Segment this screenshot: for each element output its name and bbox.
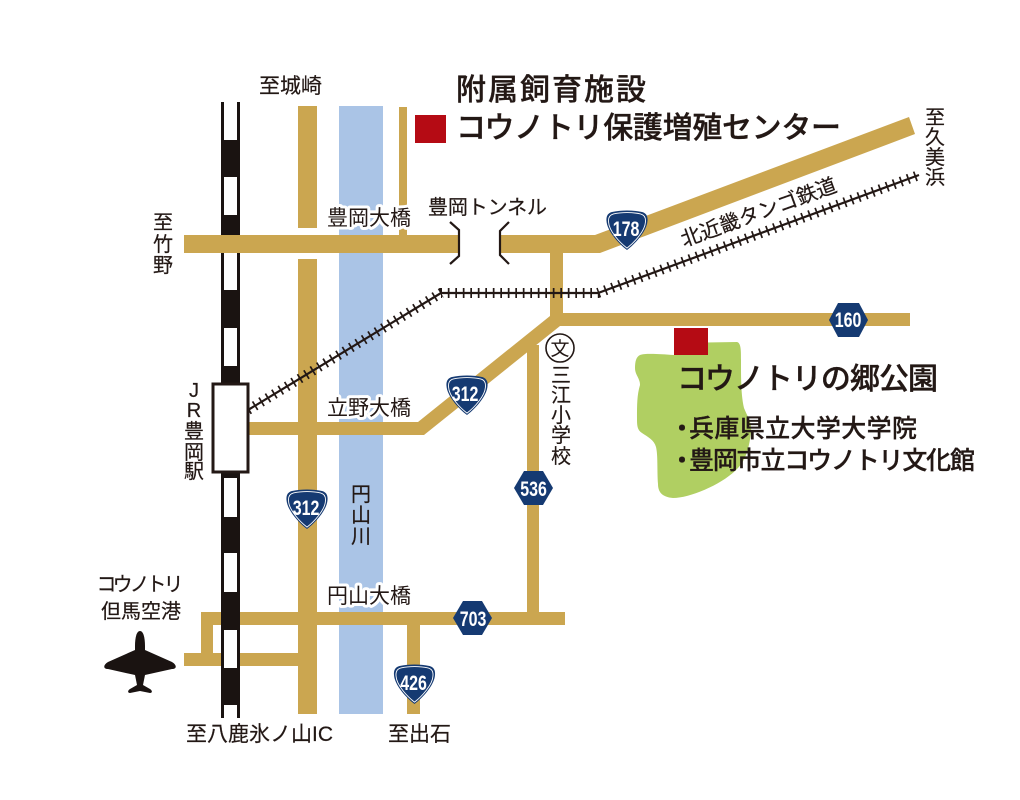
label: JR Toyooka station: R xyxy=(187,400,201,422)
label: to Kumihama xyxy=(925,107,945,189)
bridge label: Toyooka: 豊岡大橋 xyxy=(327,207,411,230)
bridge label: Tateno: 立野大橋 xyxy=(327,397,411,420)
label: Mie elementary school: 江 xyxy=(551,384,571,407)
label: JR Toyooka station: 岡 xyxy=(184,442,204,464)
label: to Kinosaki: 至城崎 xyxy=(259,75,322,98)
icon: school symbol: 文 xyxy=(550,338,570,360)
label: to Izushi: 至出石 xyxy=(388,723,451,746)
label: to Takeno xyxy=(153,212,173,277)
label: to Kumihama: 浜 xyxy=(925,166,945,189)
icon: school symbol xyxy=(546,334,574,362)
label: Mie elementary school xyxy=(551,365,571,468)
railway: Kitakinki Tango line xyxy=(248,175,919,410)
label: Maruyama river: 山 xyxy=(351,504,371,527)
label: JR Toyooka station: 駅 xyxy=(184,461,204,483)
route shield: 426: 426 xyxy=(400,671,427,695)
park facilities: ・ xyxy=(669,447,695,475)
label: to Yoka Hyonosen IC: 至八鹿氷ノ山IC xyxy=(186,723,333,746)
icon: airplane xyxy=(104,631,176,693)
label: to Takeno: 竹 xyxy=(153,233,173,256)
route sign: 703: 703 xyxy=(460,607,486,631)
route shield: 426 xyxy=(394,664,435,704)
label: Tajima airport: コウノトリ xyxy=(96,574,184,596)
river: Maruyama xyxy=(339,106,383,714)
title: breeding center: コウノトリ保護増殖センター xyxy=(456,112,841,145)
route shield: 312 lower xyxy=(286,490,328,529)
park facilities xyxy=(669,415,975,475)
label: JR Toyooka station: J xyxy=(189,380,199,402)
park facilities: ・ xyxy=(669,415,695,443)
label: Mie elementary school: 校 xyxy=(551,445,571,468)
label: JR Toyooka station: 豊 xyxy=(184,420,204,443)
label: Mie elementary school: 三 xyxy=(551,365,571,387)
label: to Takeno: 至 xyxy=(153,212,173,234)
tunnel marks xyxy=(450,222,509,264)
route sign: 160: 160 xyxy=(835,308,861,332)
label: Mie elementary school: 学 xyxy=(551,424,571,447)
bridge label: Maruyama: 円山大橋 xyxy=(327,585,411,608)
route sign: 160 xyxy=(829,303,868,337)
label: Mie elementary school: 小 xyxy=(551,404,571,427)
label: to Takeno: 野 xyxy=(153,255,173,277)
route shield: 312 upper: 312 xyxy=(452,382,478,406)
label: Maruyama river xyxy=(351,484,371,548)
road network xyxy=(184,106,915,714)
facility marker: park xyxy=(674,328,708,355)
route sign: 536: 536 xyxy=(520,477,547,501)
park area xyxy=(635,342,751,498)
park name: コウノトリの郷公園 xyxy=(677,363,938,396)
station: JR Toyooka xyxy=(213,384,248,472)
lower roads under rail xyxy=(184,612,565,666)
label: Maruyama river: 円 xyxy=(351,484,371,506)
route shield: 178: 178 xyxy=(613,217,639,241)
railway: JR line xyxy=(221,102,240,718)
label: to Kumihama: 至 xyxy=(925,107,945,129)
route shield: 312 lower: 312 xyxy=(293,496,319,520)
park facilities: 豊岡市立コウノトリ文化館 xyxy=(689,447,975,475)
title: breeding center: 附属飼育施設 xyxy=(456,74,646,107)
route sign: 703 xyxy=(453,601,492,635)
label: to Kumihama: 美 xyxy=(925,146,945,169)
title: breeding center xyxy=(456,74,841,145)
route shield: 178 xyxy=(606,210,648,250)
route sign: 536 xyxy=(514,471,553,505)
label: Kitakinki Tango Railway: 北近畿タンゴ鉄道 xyxy=(678,174,840,252)
facility marker: breeding center xyxy=(415,115,446,143)
label: JR Toyooka station xyxy=(184,380,204,483)
label: Tajima airport: 但馬空港 xyxy=(101,600,181,623)
label: to Kumihama: 久 xyxy=(925,126,945,149)
route shield: 312 upper xyxy=(446,376,488,415)
label: Tajima airport xyxy=(96,574,184,623)
label: Toyooka tunnel: 豊岡トンネル xyxy=(428,196,547,219)
park facilities: 兵庫県立大学大学院 xyxy=(689,415,917,443)
label: Maruyama river: 川 xyxy=(351,526,371,548)
